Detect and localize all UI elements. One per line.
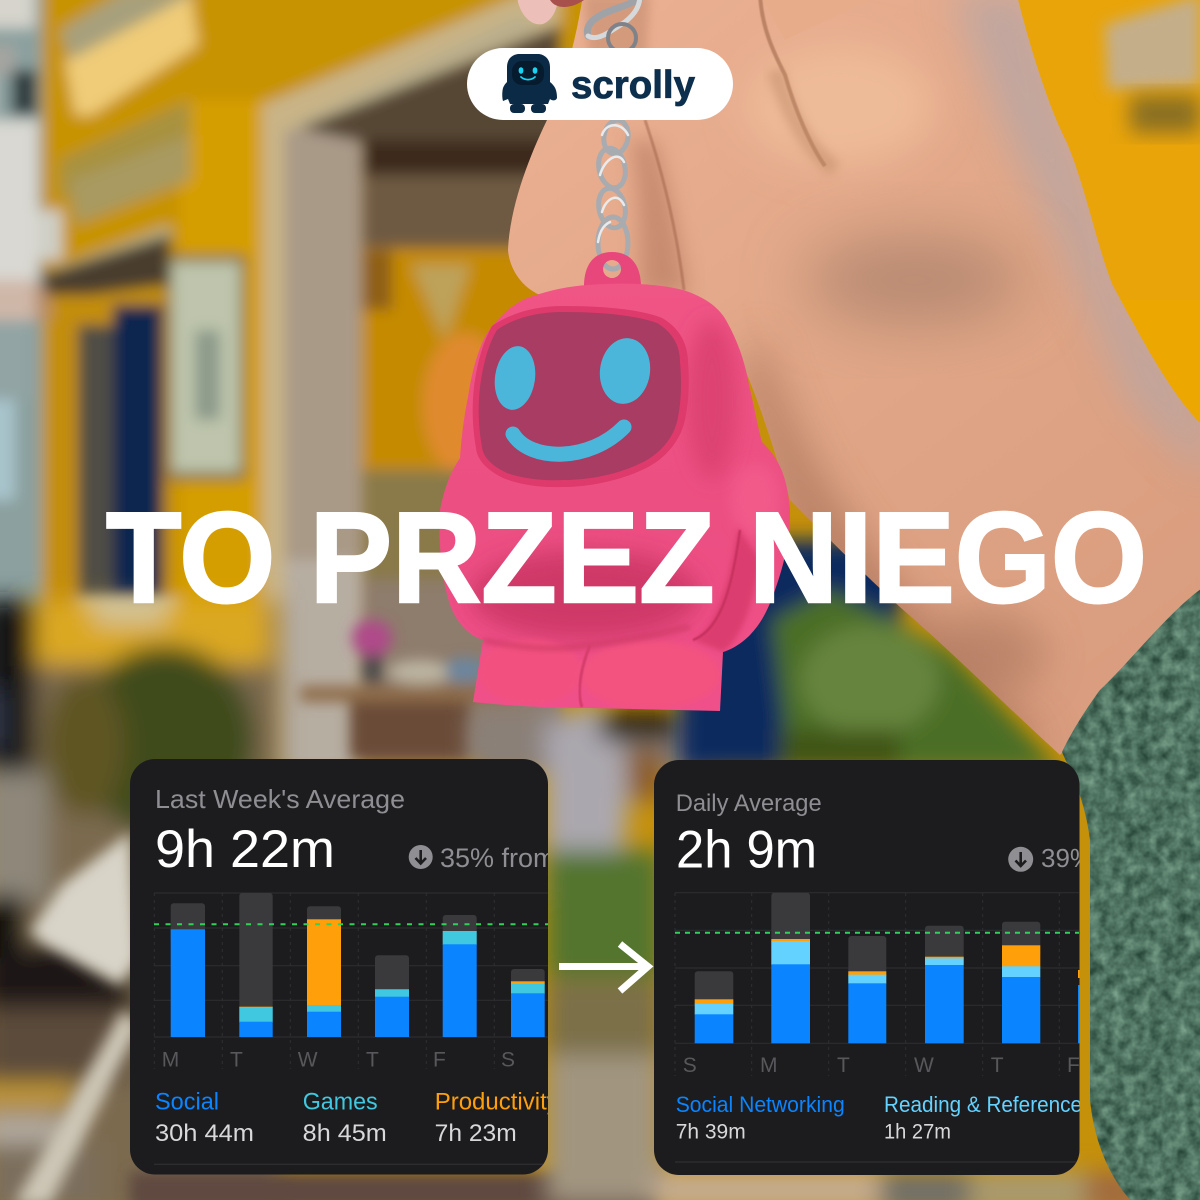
legend: games: Games [303,1088,378,1116]
legend: productivity: 7h 23m [435,1120,517,1147]
day labels: T [991,1054,1004,1077]
mascot body [440,284,790,711]
mascot smile [513,427,624,454]
arrow between panels [559,944,648,991]
goal line [675,932,1079,934]
lower left: yellow, plant, chair [0,600,280,1200]
mascot face rim [473,306,689,487]
photo: hand holding keychain [500,0,1200,765]
mascot tag loop [584,252,641,287]
day labels: W [298,1048,318,1072]
chain links [595,118,631,269]
day labels: T [230,1048,243,1072]
mascot left eye [491,344,539,412]
bar: thursday [1002,922,1040,1043]
bar chart: last week [154,893,548,1072]
big number: 9h 22m: 9h 22m [155,820,335,879]
hand shading [630,0,1200,760]
day labels: T [837,1054,850,1077]
day labels: S [683,1054,697,1077]
yellow wall and door, upper left [0,0,620,770]
thumb top shade [582,0,651,48]
sweater sleeve [1062,586,1200,1200]
icon: scrolly mascot [502,54,557,113]
bar: wednesday [925,926,964,1043]
panel: last week screen time [130,759,559,1175]
legend: social: 30h 44m [155,1120,254,1147]
logo pill [467,48,733,120]
fingernail at top [517,0,590,24]
logo wordmark: scrolly [571,64,695,107]
lower middle and right [470,705,1145,1200]
bar chart: daily average [675,893,1080,1077]
bar: saturday [511,969,545,1037]
keychain clasp and chain [587,0,644,269]
legend: productivity [436,1092,548,1141]
day labels: T [366,1048,379,1072]
day labels: F [433,1048,446,1072]
big number: 2h 9m: 2h 9m [676,820,817,880]
bar: tuesday [239,893,273,1037]
mascot shading [470,320,779,709]
legend: games [304,1092,386,1141]
day labels [684,1058,1079,1072]
bar: sunday [695,971,733,1043]
day labels: M [162,1048,179,1072]
day labels [164,1052,514,1066]
legend: reading and reference: 1h 27m [884,1120,951,1144]
legend: social: Social [155,1088,219,1116]
legend: reading and reference [886,1096,1080,1138]
panel: daily average screen time [654,760,1093,1175]
bar: monday [171,903,205,1037]
door frame [262,0,560,770]
bar: friday, clipped [1078,970,1080,1044]
keychain mascot [440,252,790,711]
day labels: S [501,1048,515,1072]
white chair [14,832,140,1200]
bar: wednesday [307,906,341,1037]
change label: 35% from: 35% from [440,843,556,873]
bar: friday [443,915,477,1037]
interior and table behind panels [130,620,660,1200]
icon: down arrow circle [409,845,433,869]
icon: down arrow circle [1008,847,1033,872]
legend: games: 8h 45m [303,1120,387,1147]
navy and green behind mascot [680,540,1060,770]
bar: tuesday [848,936,886,1043]
bar: thursday [375,955,409,1037]
clasp [587,0,644,36]
day labels: F [1067,1054,1080,1077]
legend: social networking [676,1096,844,1138]
title: TO PRZEZ NIEGO [106,486,1147,630]
change label: 39%: 39% [1041,843,1093,873]
heading: last week's average: Last Week's Average [155,784,405,814]
heading: daily average: Daily Average [676,790,822,817]
mascot screen face [479,312,681,480]
yellow wall, upper right [1000,0,1200,615]
day labels: W [914,1054,934,1077]
legend: productivity: Productivity [435,1088,559,1116]
legend: reading and reference: Reading & Reference [884,1092,1082,1117]
day labels: M [760,1054,778,1077]
mascot right eye [596,335,654,407]
legend: social networking: Social Networking [676,1092,845,1117]
legend: social networking: 7h 39m [676,1120,746,1144]
bar: monday [771,893,810,1043]
legend: social [156,1092,252,1141]
goal line [154,923,548,925]
